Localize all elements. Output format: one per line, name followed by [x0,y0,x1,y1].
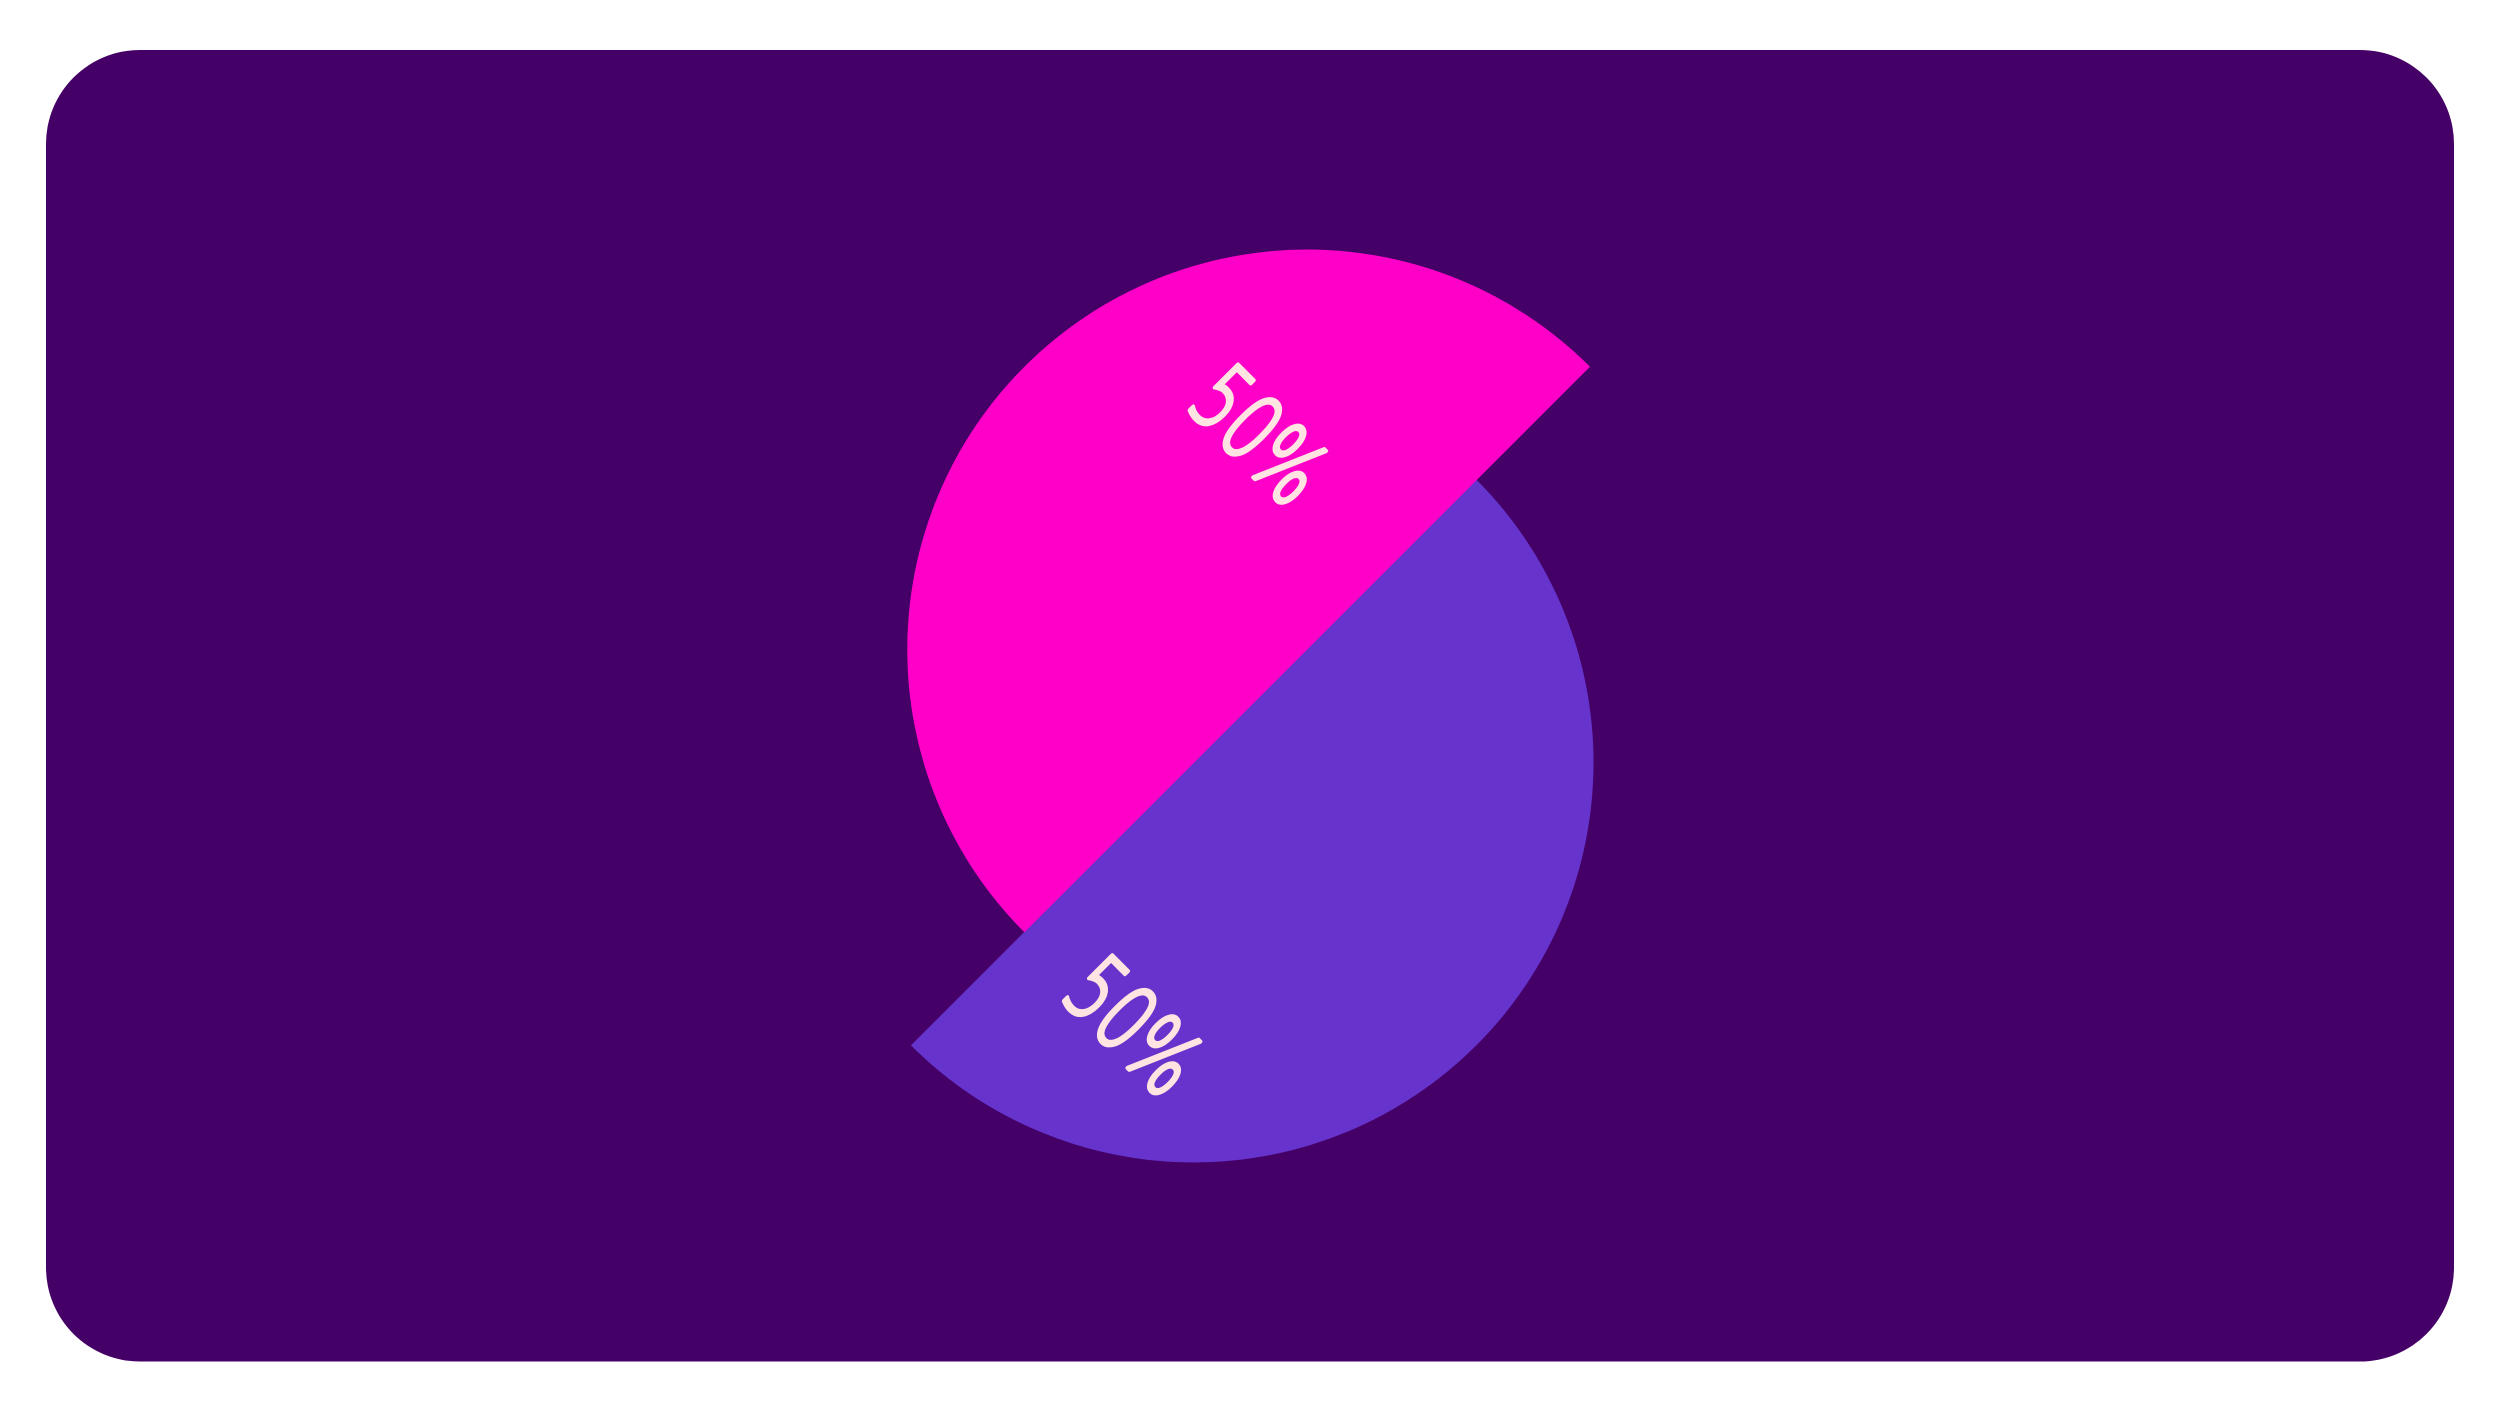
slice: purple 50% [911,480,1594,1162]
label: pink slice 50%: 50% [1169,346,1348,526]
label: purple slice 50%: 50% [1043,937,1223,1116]
slice: pink 50% [907,250,1590,932]
pie chart [907,250,1594,1162]
